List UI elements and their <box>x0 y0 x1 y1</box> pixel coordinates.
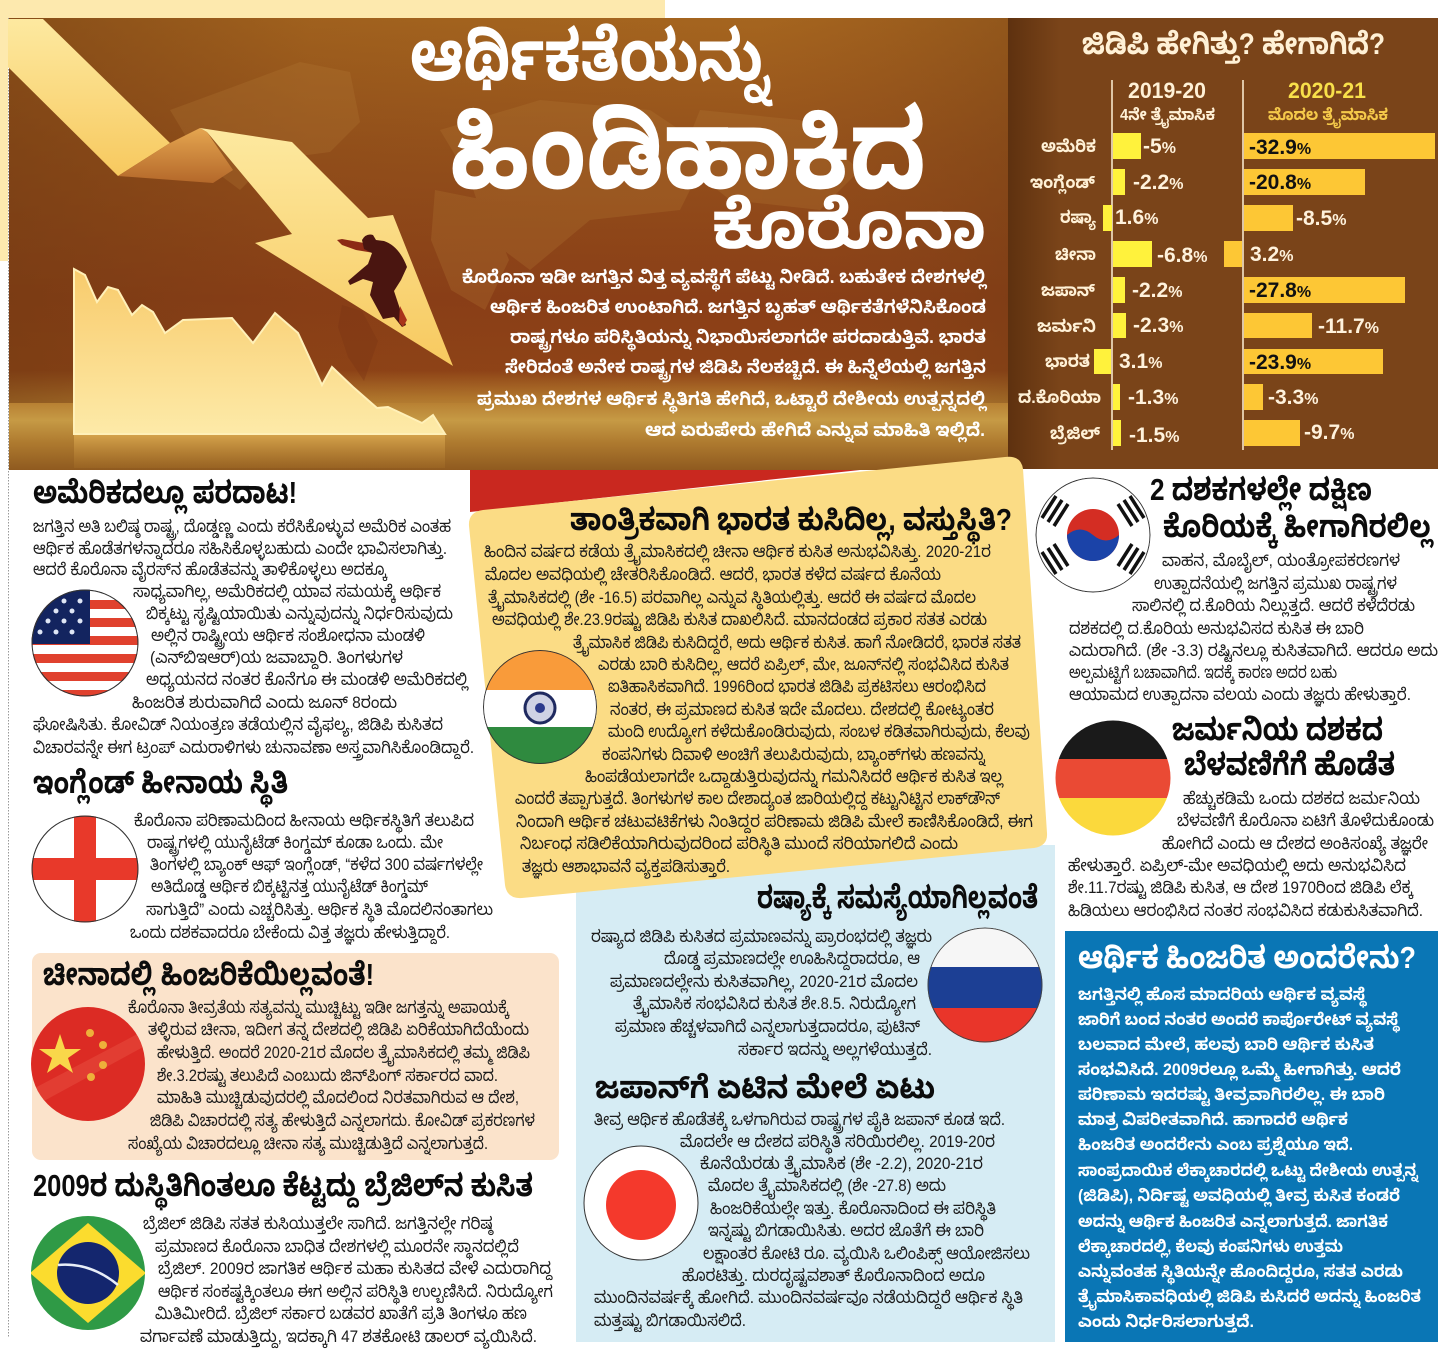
country labels: ದ.ಕೊರಿಯಾ <box>1018 388 1101 407</box>
text block: America: ಘೋಷಿಸಿತು. ಕೋವಿಡ್ ನಿಯಂತ್ರಣ ತಡೆಯಲ್ಲಿನ ವೈಫಲ್ಯ, ಜಿಡಿಪಿ ಕುಸಿತದ <box>33 716 443 738</box>
heading: South Korea <box>1150 472 1434 549</box>
text block: Germany: ಹೆಚ್ಚುಕಡಿಮೆ ಒಂದು ದಶಕದ ಜರ್ಮನಿಯ <box>1183 790 1420 811</box>
text block: intro: ಆರ್ಥಿಕ ಹಿಂಜರಿತ ಉಂಟಾಗಿದೆ. ಜಗತ್ತಿನ ಬೃಹತ್ ಆರ್ಥಿಕತೆಗಳೆನಿಸಿಕೊಂಡ <box>490 297 986 321</box>
heading: Japan: ಜಪಾನ್‌ಗೆ ಏಟಿನ ಮೇಲೆ ಏಟು <box>595 1070 935 1105</box>
text block: England: ತಿಂಗಳಲ್ಲಿ ಬ್ಯಾಂಕ್ ಆಫ್ ಇಂಗ್ಲೆಂಡ್, “ಕಳೆದ 300 ವರ್ಷಗಳಲ್ಲೇ <box>150 856 483 877</box>
icon: USA flag <box>31 589 139 698</box>
text block: Japan: ಮತ್ತಷ್ಟು ಬಿಗಡಾಯಿಸಲಿದೆ. <box>594 1312 746 1333</box>
text block: China: ಹೇಳುತ್ತಿದೆ. ಅಂದರೆ 2020-21ರ ಮೊದಲ ತ್ರೈಮಾಸಿಕದಲ್ಲಿ ತಮ್ಮ ಜಿಡಿಪಿ <box>157 1044 530 1067</box>
text block: Brazil: ಬ್ರೆಜಿಲ್ ಜಿಡಿಪಿ ಸತತ ಕುಸಿಯುತ್ತಲೇ ಸಾಗಿದೆ. ಜಗತ್ತಿನಲ್ಲೇ ಗರಿಷ್ಠ <box>143 1215 494 1236</box>
text block: England: ಕೊರೊನಾ ಪರಿಣಾಮದಿಂದ ಹೀನಾಯ ಆರ್ಥಿಕಸ್ಥಿತಿಗೆ ತಲುಪಿದ <box>134 812 474 834</box>
icon: Germany flag <box>1055 720 1171 836</box>
icon: climbing man <box>337 235 407 327</box>
text block: America: ಬಿಕ್ಕಟ್ಟು ಸೃಷ್ಟಿಯಾಯಿತು ಎನ್ನುವುದನ್ನು ನಿರ್ಧರಿಸುವುದು <box>146 605 453 627</box>
text block: India: ತಜ್ಞರು ಆಶಾಭಾವನೆ ವ್ಯಕ್ತಪಡಿಸುತ್ತಾರೆ. <box>522 858 730 879</box>
text block: South Korea: ಉತ್ಪಾದನೆಯಲ್ಲಿ ಜಗತ್ತಿನ ಪ್ರಮುಖ ರಾಷ್ಟ್ರಗಳ <box>1154 575 1397 598</box>
text block: South Korea: ದಶಕದಲ್ಲಿ ದ.ಕೊರಿಯ ಅನುಭವಿಸದ ಕುಸಿತ ಈ ಬಾರಿ <box>1069 620 1364 640</box>
bars 2019-20 <box>1094 133 1152 446</box>
panel: light blue Russia Japan <box>576 845 1055 1342</box>
values 2020-21: -27.8% <box>1249 279 1311 302</box>
text block: India: ಹಿಂಪಡೆಯಲಾಗದೇ ಒದ್ದಾಡುತ್ತಿರುವುದನ್ನು ಗಮನಿಸಿದರೆ ಆರ್ಥಿಕ ಕುಸಿತ ಇಲ್ಲ <box>585 768 1004 789</box>
text block: America: ವಿಚಾರವನ್ನೇ ಈಗ ಟ್ರಂಪ್ ಎದುರಾಳಿಗಳು ಚುನಾವಣಾ ಅಸ್ತ್ರವಾಗಿಸಿಕೊಂಡಿದ್ದಾರೆ. <box>33 739 474 761</box>
column header 2019-20: 4ನೇ ತ್ರೈಮಾಸಿಕ <box>1120 107 1215 129</box>
section: Russia <box>591 880 1043 1062</box>
text block: Brazil: ಪ್ರಮಾಣದ ಕೊರೊನಾ ಬಾಧಿತ ದೇಶಗಳಲ್ಲಿ ಮೂರನೇ ಸ್ಥಾನದಲ್ಲಿದೆ <box>155 1238 519 1260</box>
heading: China: ಚೀನಾದಲ್ಲಿ ಹಿಂಜರಿಕೆಯಿಲ್ಲವಂತೆ! <box>43 957 374 997</box>
text block: what is recession: ಹಿಂಜರಿತ ಅಂದರೇನು ಎಂಬ ಪ್ರಶ್ನೆಯೂ ಇದೆ. <box>1078 1136 1353 1157</box>
chart heading: ಜಿಡಿಪಿ ಹೇಗಿತ್ತು? ಹೇಗಾಗಿದೆ? <box>1082 28 1385 64</box>
column header 2020-21: 2020-21 <box>1288 78 1366 103</box>
title: ಆರ್ಥಿಕತೆಯನ್ನು <box>410 17 773 107</box>
text block: India: ನಂತರ, ಈ ಪ್ರಮಾಣದ ಕುಸಿತ ಇದೇ ಮೊದಲು. ದೇಶದಲ್ಲಿ ಕೋಟ್ಯಂತರ <box>610 701 994 722</box>
text block: Japan: ಮೊದಲ ತ್ರೈಮಾಸಿಕದಲ್ಲಿ (ಶೇ -27.8) ಅದು <box>708 1177 946 1200</box>
text block: England <box>130 812 493 945</box>
text block: what is recession: ಲೆಕ್ಕಾಚಾರದಲ್ಲಿ, ಕೆಲವು ಕಂಪನಿಗಳು ಉತ್ತಮ <box>1078 1238 1343 1259</box>
title: ಹಿಂಡಿಹಾಕಿದ <box>450 89 926 212</box>
heading: Russia: ರಷ್ಯಾಕ್ಕೆ ಸಮಸ್ಯೆಯಾಗಿಲ್ಲವಂತೆ <box>757 880 1038 921</box>
country labels <box>1018 137 1101 445</box>
text block: what is recession: ಪರಿಣಾಮ ಇದರಷ್ಟು ತೀವ್ರವಾಗಿರಲಿಲ್ಲ. ಈ ಬಾರಿ <box>1078 1086 1385 1107</box>
text block: Japan: ತೀವ್ರ ಆರ್ಥಿಕ ಹೊಡೆತಕ್ಕೆ ಒಳಗಾಗಿರುವ ರಾಷ್ಟ್ರಗಳ ಪೈಕಿ ಜಪಾನ್ ಕೂಡ ಇದೆ. <box>594 1111 1005 1134</box>
heading: Germany: ಬೆಳವಣಿಗೆಗೆ ಹೊಡೆತ <box>1184 747 1395 782</box>
heading: South Korea: 2 ದಶಕಗಳಲ್ಲೇ ದಕ್ಷಿಣ <box>1150 472 1372 512</box>
text block: what is recession: (ಜಿಡಿಪಿ), ನಿರ್ದಿಷ್ಟ ಅವಧಿಯಲ್ಲಿ ತೀವ್ರ ಕುಸಿತ ಕಂಡರೆ <box>1078 1187 1400 1208</box>
heading: England: ಇಂಗ್ಲೆಂಡ್ ಹೀನಾಯ ಸ್ಥಿತಿ <box>33 765 288 808</box>
values 2020-21: -8.5% <box>1296 207 1346 230</box>
panel: hero banner <box>8 17 1009 470</box>
text block: Brazil: ಆರ್ಥಿಕ ಸಂಕಷ್ಟಕ್ಕಿಂತಲೂ ಈಗ ಅಲ್ಲಿನ ಪರಿಸ್ಥಿತಿ ಉಲ್ಬಣಿಸಿದೆ. ನಿರುದ್ಯೋಗ <box>158 1283 553 1305</box>
panel: what is recession <box>1065 931 1438 1342</box>
text block: intro: ಸೇರಿದಂತೆ ಅನೇಕ ರಾಷ್ಟ್ರಗಳ ಜಿಡಿಪಿ ನೆಲಕಚ್ಚಿದೆ. ಈ ಹಿನ್ನೆಲೆಯಲ್ಲಿ ಜಗತ್ತಿನ <box>505 357 986 383</box>
title <box>410 17 986 262</box>
column header 2020-21 <box>1268 78 1388 129</box>
text block: what is recession: ಜಗತ್ತಿನಲ್ಲಿ ಹೊಸ ಮಾದರಿಯ ಆರ್ಥಿಕ ವ್ಯವಸ್ಥೆ <box>1078 986 1368 1008</box>
text block: America: ಹಿಂಜರಿತ ಶುರುವಾಗಿದೆ ಎಂದು ಜೂನ್ 8ರಂದು <box>132 694 397 712</box>
text block: what is recession: ಎನ್ನುವಂತಹ ಸ್ಥಿತಿಯನ್ನೇ ಹೊಂದಿದ್ದರೂ, ಸತತ ಎರಡು <box>1078 1263 1403 1285</box>
values 2020-21: -9.7% <box>1304 421 1354 444</box>
chart: falling area graph <box>74 269 445 468</box>
red wedge behind centre panel <box>470 470 860 512</box>
title: ಕೊರೊನಾ <box>712 188 986 262</box>
values 2019-20: 3.1% <box>1119 350 1162 373</box>
heading: Germany: ಜರ್ಮನಿಯ ದಶಕದ <box>1172 712 1383 747</box>
text block: India: ಐತಿಹಾಸಿಕವಾಗಿದೆ. 1996ರಿಂದ ಭಾರತ ಜಿಡಿಪಿ ಪ್ರಕಟಿಸಲು ಆರಂಭಿಸಿದ <box>608 678 986 697</box>
text block: India: ಹಿಂದಿನ ವರ್ಷದ ಕಡೆಯ ತ್ರೈಮಾಸಿಕದಲ್ಲಿ ಚೀನಾ ಆರ್ಥಿಕ ಕುಸಿತ ಅನುಭವಿಸಿತ್ತು. 2020-21ರ <box>484 543 991 566</box>
text block: what is recession <box>1078 986 1421 1333</box>
text block: China <box>128 999 535 1156</box>
text block: America: ಅಧ್ಯಯನದ ನಂತರ ಕೊನೆಗೂ ಈ ಮಂಡಳಿ ಅಮೆರಿಕದಲ್ಲಿ <box>146 671 469 692</box>
left cream strip <box>0 18 8 261</box>
section: South Korea <box>1036 472 1438 707</box>
text block: America: ಅಲ್ಲಿನ ರಾಷ್ಟ್ರೀಯ ಆರ್ಥಿಕ ಸಂಶೋಧನಾ ಮಂಡಳಿ <box>151 627 425 650</box>
text block: Germany: ಹೇಳುತ್ತಾರೆ. ಏಪ್ರಿಲ್-ಮೇ ಅವಧಿಯಲ್ಲಿ ಅದು ಅನುಭವಿಸಿದ <box>1068 857 1406 877</box>
values 2019-20: -2.3% <box>1133 314 1183 337</box>
text block: Germany <box>1068 790 1434 920</box>
text block: what is recession: ಸಂಭವಿಸಿದೆ. 2009ರಲ್ಲೂ ಒಮ್ಮೆ ಹೀಗಾಗಿತ್ತು. ಆದರೆ <box>1078 1061 1401 1082</box>
icon: Japan flag <box>584 1146 698 1260</box>
text block: what is recession: ಅದನ್ನು ಆರ್ಥಿಕ ಹಿಂಜರಿತ ಎನ್ನಲಾಗುತ್ತದೆ. ಜಾಗತಿಕ <box>1078 1213 1388 1234</box>
country labels: ಅಮೆರಿಕ <box>1041 137 1096 156</box>
text block: China: ಶೇ.3.2ರಷ್ಟು ತಲುಪಿದೆ ಎಂಬುದು ಜಿನ್‌ಪಿಂಗ್ ಸರ್ಕಾರದ ವಾದ. <box>157 1067 498 1088</box>
text block: India: ಮಂದಿ ಉದ್ಯೋಗ ಕಳೆದುಕೊಂಡಿರುವುದು, ಸಂಬಳ ಕಡಿತವಾಗಿರುವುದು, ಕೆಲವು <box>608 723 1030 744</box>
values 2019-20: -1.3% <box>1128 386 1178 409</box>
text block: India: ತ್ರೈಮಾಸಿಕದಲ್ಲಿ (ಶೇ -16.5) ಪರವಾಗಿಲ್ಲ ಎನ್ನುವ ಸ್ಥಿತಿಯಲ್ಲಿತ್ತು. ಆದರೆ ಈ ವರ್ಷದ ಮೊದಲ <box>488 589 976 612</box>
text block: America: ಆರ್ಥಿಕ ಹೊಡೆತಗಳನ್ನಾದರೂ ಸಹಿಸಿಕೊಳ್ಳಬಹುದು ಎಂದೇ ಭಾವಿಸಲಾಗಿತ್ತು. <box>33 540 447 561</box>
text block: England: ಅತಿದೊಡ್ಡ ಆರ್ಥಿಕ ಬಿಕ್ಕಟ್ಟಿನತ್ತ ಯುನೈಟೆಡ್ ಕಿಂಗ್ಡಮ್ <box>151 878 429 900</box>
icon: Russia flag <box>927 927 1043 1044</box>
text block: Brazil: ಮಿತಿಮೀರಿದೆ. ಬ್ರೆಜಿಲ್ ಸರ್ಕಾರ ಬಡವರ ಖಾತೆಗೆ ಪ್ರತಿ ತಿಂಗಳೂ ಹಣ <box>155 1305 527 1324</box>
values 2019-20 <box>1115 135 1207 447</box>
icon: China flag <box>31 1007 145 1121</box>
text block: intro: ಕೊರೊನಾ ಇಡೀ ಜಗತ್ತಿನ ವಿತ್ತ ವ್ಯವಸ್ಥೆಗೆ ಪೆಟ್ಟು ನೀಡಿದೆ. ಬಹುತೇಕ ದೇಶಗಳಲ್ಲಿ <box>462 267 988 292</box>
text block: Russia: ರಷ್ಯಾದ ಜಿಡಿಪಿ ಕುಸಿತದ ಪ್ರಮಾಣವನ್ನು ಪ್ರಾರಂಭದಲ್ಲಿ ತಜ್ಞರು <box>591 928 932 949</box>
icon: England flag <box>31 815 139 923</box>
text block: America: ಆದರೆ ಕೊರೊನಾ ವೈರಸ್‌ನ ಹೊಡೆತವನ್ನು ತಾಳಿಕೊಳ್ಳಲು ಅದಕ್ಕೂ <box>33 561 388 583</box>
country labels: ಇಂಗ್ಲೆಂಡ್ <box>1030 173 1096 195</box>
values 2020-21: -23.9% <box>1249 351 1311 374</box>
heading: America: ಅಮೆರಿಕದಲ್ಲೂ ಪರದಾಟ! <box>33 475 297 515</box>
text block: intro: ರಾಷ್ಟ್ರಗಳೂ ಪರಿಸ್ಥಿತಿಯನ್ನು ನಿಭಾಯಿಸಲಾಗದೇ ಪರದಾಡುತ್ತಿವೆ. ಭಾರತ <box>510 327 986 353</box>
section: America <box>31 475 474 761</box>
text block: Japan: ಮೊದಲೇ ಆ ದೇಶದ ಪರಿಸ್ಥಿತಿ ಸರಿಯಿರಲಿಲ್ಲ. 2019-20ರ <box>680 1133 995 1155</box>
text block: India: ಮೊದಲ ಅವಧಿಯಲ್ಲಿ ಚೇತರಿಸಿಕೊಂಡಿದೆ. ಆದರೆ, ಭಾರತ ಕಳೆದ ವರ್ಷದ ಕೊನೆಯ <box>485 566 941 586</box>
heading: Germany <box>1172 712 1395 782</box>
panel: China <box>31 953 559 1160</box>
values 2019-20: -1.5% <box>1129 424 1179 447</box>
values 2020-21: -20.8% <box>1249 171 1311 194</box>
icon: Brazil flag <box>30 1216 146 1330</box>
text block: India: ತ್ರೈಮಾಸಿಕ ಜಿಡಿಪಿ ಕುಸಿದಿದ್ದರೆ, ಅದು ಆರ್ಥಿಕ ಕುಸಿತ. ಹಾಗೆ ನೋಡಿದರೆ, ಭಾರತ ಸತತ <box>573 634 1021 657</box>
text block: America <box>33 518 474 761</box>
icon: falling arrow <box>8 19 453 366</box>
column header 2019-20 <box>1120 78 1215 129</box>
values 2020-21 <box>1249 136 1379 444</box>
illustration: world map shadow <box>170 62 860 310</box>
text block: India: ನಿಂದಾಗಿ ಆರ್ಥಿಕ ಚಟುವಟಿಕೆಗಳು ನಿಂತಿದ್ದರ ಪರಿಣಾಮ ಜಿಡಿಪಿ ಮೇಲೆ ಕಾಣಿಸಿಕೊಂಡಿದೆ, ಈಗ <box>516 813 1033 834</box>
section: Germany <box>1055 712 1434 920</box>
text block: Germany: ಹಿಡಿಯಲು ಆರಂಭಿಸಿದ ನಂತರ ಸಂಭವಿಸಿದ ಕಡುಕುಸಿತವಾಗಿದೆ. <box>1068 902 1423 920</box>
country labels: ಬ್ರೆಜಿಲ್ <box>1050 424 1100 445</box>
text block: India: ನಿರ್ಬಂಧ ಸಡಿಲಿಕೆಯಾಗಿರುವುದರಿಂದ ಪರಿಸ್ಥಿತಿ ಮುಂದೆ ಸರಿಯಾಗಲಿದೆ ಎಂದು <box>520 835 958 857</box>
heading: India: ತಾಂತ್ರಿಕವಾಗಿ ಭಾರತ ಕುಸಿದಿಲ್ಲ, ವಸ್ತುಸ್ಥಿತಿ? <box>570 502 1012 545</box>
text block: intro <box>462 267 988 443</box>
text block: South Korea: ವಾಹನ, ಮೊಬೈಲ್, ಯಂತ್ರೋಪಕರಣಗಳ <box>1162 552 1400 574</box>
text block: what is recession: ಎಂದು ನಿರ್ಧರಿಸಲಾಗುತ್ತದೆ. <box>1078 1313 1254 1333</box>
text block: what is recession: ತ್ರೈಮಾಸಿಕಾವಧಿಯಲ್ಲಿ ಜಿಡಿಪಿ ಕುಸಿದರೆ ಅದನ್ನು ಹಿಂಜರಿತ <box>1078 1288 1421 1311</box>
text block: intro: ಪ್ರಮುಖ ದೇಶಗಳ ಆರ್ಥಿಕ ಸ್ಥಿತಿಗತಿ ಹೇಗಿದೆ, ಒಟ್ಟಾರೆ ದೇಶೀಯ ಉತ್ಪನ್ನದಲ್ಲಿ <box>477 389 988 414</box>
text block: Japan: ಹೊರಟಿತ್ತು. ದುರದೃಷ್ಟವಶಾತ್ ಕೊರೊನಾದಿಂದ ಅದೂ <box>682 1267 985 1289</box>
text block: Brazil: ಬ್ರೆಜಿಲ್. 2009ರ ಜಾಗತಿಕ ಆರ್ಥಿಕ ಮಹಾ ಕುಸಿತದ ವೇಳೆ ಎದುರಾಗಿದ್ದ <box>158 1260 553 1281</box>
text block: Japan: ಮುಂದಿನವರ್ಷಕ್ಕೆ ಹೋಗಿದೆ. ಮುಂದಿನವರ್ಷವೂ ನಡೆಯದಿದ್ದರೆ ಆರ್ಥಿಕ ಸ್ಥಿತಿ <box>594 1289 1023 1311</box>
text block: Russia: ಸರ್ಕಾರ ಇದನ್ನು ಅಲ್ಲಗಳೆಯುತ್ತದೆ. <box>738 1041 932 1062</box>
section: Japan <box>584 1070 1030 1333</box>
values 2019-20: -5% <box>1143 135 1176 158</box>
text block: Russia: ದೊಡ್ಡ ಪ್ರಮಾಣದಲ್ಲೇ ಊಹಿಸಿದ್ದರಾದರೂ, ಆ <box>664 950 920 971</box>
text block: Russia: ತ್ರೈಮಾಸಿಕ ಸಂಭವಿಸಿದ ಕುಸಿತ ಶೇ.8.5. ನಿರುದ್ಯೋಗ <box>633 995 916 1018</box>
heading: Brazil: 2009ರ ದುಸ್ಥಿತಿಗಿಂತಲೂ ಕೆಟ್ಟದ್ದು ಬ್ರೆಜಿಲ್‌ನ ಕುಸಿತ <box>33 1168 533 1211</box>
section: England <box>31 765 493 945</box>
text block: South Korea <box>1069 552 1438 707</box>
text block: China: ಮಾಹಿತಿ ಮುಚ್ಚಿಡುವುದರಲ್ಲಿ ಮೊದಲಿಂದ ನಿರತವಾಗಿರುವ ಆ ದೇಶ, <box>157 1089 519 1110</box>
section: Brazil <box>30 1168 553 1349</box>
text block: China: ತಳ್ಳಿರುವ ಚೀನಾ, ಇದೀಗ ತನ್ನ ದೇಶದಲ್ಲಿ ಜಿಡಿಪಿ ಏರಿಕೆಯಾಗಿದೆಯೆಂದು <box>148 1021 529 1042</box>
column header 2020-21: ಮೊದಲ ತ್ರೈಮಾಸಿಕ <box>1268 107 1388 129</box>
column header 2019-20: 2019-20 <box>1128 78 1206 103</box>
text block: Brazil: ವರ್ಗಾವಣೆ ಮಾಡುತ್ತಿದ್ದು, ಇದಕ್ಕಾಗಿ 47 ಶತಕೋಟಿ ಡಾಲರ್ ವ್ಯಯಿಸಿದೆ. <box>140 1328 537 1349</box>
text block: what is recession: ಮಾತ್ರ ವಿಪರೀತವಾಗಿದೆ. ಹಾಗಾದರೆ ಆರ್ಥಿಕ <box>1078 1111 1348 1131</box>
text block: Germany: ಹೋಗಿದೆ ಎಂದು ಆ ದೇಶದ ಅಂಕಿಸಂಖ್ಯೆ ತಜ್ಞರೇ <box>1162 835 1428 856</box>
text block: Russia <box>591 928 932 1062</box>
country labels: ಭಾರತ <box>1045 352 1090 371</box>
text block: America: ಸಾಧ್ಯವಾಗಿಲ್ಲ, ಅಮೆರಿಕದಲ್ಲಿ ಯಾವ ಸಮಯಕ್ಕೆ ಆರ್ಥಿಕ <box>133 583 441 604</box>
text block: what is recession: ಜಾರಿಗೆ ಬಂದ ನಂತರ ಅಂದರೆ ಕಾರ್ಪೊರೇಟ್ ವ್ಯವಸ್ಥೆ <box>1078 1011 1401 1033</box>
country labels: ಚೀನಾ <box>1055 245 1096 264</box>
values 2019-20: 1.6% <box>1115 206 1158 229</box>
section: India text <box>483 502 1033 879</box>
text block: America: (ಎನ್‌ಬಿಇಆರ್)ಯ ಜವಾಬ್ದಾರಿ. ತಿಂಗಳುಗಳ <box>150 649 403 670</box>
country labels: ಜಪಾನ್ <box>1041 281 1096 300</box>
panel: yellow India <box>469 457 1047 898</box>
text block: India: ಕಂಪನಿಗಳು ದಿವಾಳಿ ಅಂಚಿಗೆ ತಲುಪಿರುವುದು, ಬ್ಯಾಂಕ್‌ಗಳು ಹಣವನ್ನು <box>602 746 986 767</box>
text block: China: ಕೊರೊನಾ ತೀವ್ರತೆಯ ಸತ್ಯವನ್ನು ಮುಚ್ಚಿಟ್ಟು ಇಡೀ ಜಗತ್ತನ್ನು ಅಪಾಯಕ್ಕೆ <box>128 999 510 1020</box>
text block: South Korea: ಸಾಲಿನಲ್ಲಿ ದ.ಕೊರಿಯ ನಿಲ್ಲುತ್ತದೆ. ಆದರೆ ಕಳೆದೆರಡು <box>1132 597 1415 617</box>
text block: South Korea: ಅಲ್ಪಮಟ್ಟಿಗೆ ಬಚಾವಾಗಿದೆ. ಇದಕ್ಕೆ ಕಾರಣ ಅದರ ಬಹು <box>1069 664 1337 685</box>
bars 2020-21 <box>1224 133 1435 446</box>
text block: Japan: ಹಿಂಜರಿಕೆಯಲ್ಲೇ ಇತ್ತು. ಕೊರೊನಾದಿಂದ ಈ ಪರಿಸ್ಥಿತಿ <box>710 1200 996 1222</box>
text block: America: ಜಗತ್ತಿನ ಅತಿ ಬಲಿಷ್ಠ ರಾಷ್ಟ್ರ, ದೊಡ್ಡಣ್ಣ ಎಂದು ಕರೆಸಿಕೊಳ್ಳುವ ಅಮೆರಿಕ ಎಂತಹ <box>33 518 451 541</box>
text block: India: ಅವಧಿಯಲ್ಲಿ ಶೇ.23.9ರಷ್ಟು ಜಿಡಿಪಿ ಕುಸಿತ ದಾಖಲಿಸಿದೆ. ಮಾನದಂಡದ ಪ್ರಕಾರ ಸತತ ಎರಡು <box>492 611 987 632</box>
text block: England: ರಾಷ್ಟ್ರಗಳಲ್ಲಿ ಯುನೈಟೆಡ್ ಕಿಂಗ್ಡಮ್ ಕೂಡಾ ಒಂದು. ಮೇ <box>147 834 443 857</box>
top cream strip <box>0 0 665 18</box>
text block: Germany: ಶೇ.11.7ರಷ್ಟು ಜಿಡಿಪಿ ಕುಸಿತ, ಆ ದೇಶ 1970ರಿಂದ ಜಿಡಿಪಿ ಲೆಕ್ಕ <box>1068 879 1414 900</box>
icon: South Korea flag <box>1036 478 1150 592</box>
values 2020-21: -11.7% <box>1318 315 1379 338</box>
text block: what is recession: ಬಲವಾದ ಮೇಲೆ, ಹಲವು ಬಾರಿ ಆರ್ಥಿಕ ಕುಸಿತ <box>1078 1036 1374 1054</box>
values 2020-21: 3.2% <box>1250 243 1293 266</box>
panel: GDP chart <box>1008 18 1438 469</box>
values 2019-20: -2.2% <box>1133 171 1183 194</box>
text block: England: ಒಂದು ದಶಕವಾದರೂ ಬೇಕೆಂದು ವಿತ್ತ ತಜ್ಞರು ಹೇಳುತ್ತಿದ್ದಾರೆ. <box>130 924 450 945</box>
text block: Japan: ಇನ್ನಷ್ಟು ಬಿಗಡಾಯಿಸಿತು. ಅದರ ಜೊತೆಗೆ ಈ ಬಾರಿ <box>708 1222 984 1243</box>
text block: South Korea: ಆಯಾಮದ ಉತ್ಪಾದನಾ ವಲಯ ಎಂದು ತಜ್ಞರು ಹೇಳುತ್ತಾರೆ. <box>1069 686 1411 707</box>
icon: India flag <box>483 650 597 765</box>
country labels: ರಷ್ಯಾ <box>1060 208 1096 231</box>
text block: India: ಎಂದರೆ ತಪ್ಪಾಗುತ್ತದೆ. ತಿಂಗಳುಗಳ ಕಾಲ ದೇಶಾದ್ಯಂತ ಜಾರಿಯಲ್ಲಿದ್ದ ಕಟ್ಟುನಿಟ್ಟಿನ ಲಾಕ್‌ಡೌನ್ <box>515 790 1001 811</box>
values 2019-20: -6.8% <box>1157 244 1207 267</box>
text block: Japan: ಕೊನೆಯೆರಡು ತ್ರೈಮಾಸಿಕ (ಶೇ -2.2), 2020-21ರ <box>700 1155 983 1178</box>
values 2020-21: -3.3% <box>1268 386 1318 409</box>
text block: India: ಎರಡು ಬಾರಿ ಕುಸಿದಿಲ್ಲ, ಆದರೆ ಏಪ್ರಿಲ್, ಮೇ, ಜೂನ್‌ನಲ್ಲಿ ಸಂಭವಿಸಿದ ಕುಸಿತ <box>598 656 1009 676</box>
text block: China: ಜಿಡಿಪಿ ವಿಚಾರದಲ್ಲಿ ಸತ್ಯ ಹೇಳುತ್ತಿದೆ ಎನ್ನಲಾಗದು. ಕೋವಿಡ್ ಪ್ರಕರಣಗಳ <box>150 1112 535 1133</box>
text block: India <box>484 543 1033 879</box>
text block: Japan: ಲಕ್ಷಾಂತರ ಕೋಟಿ ರೂ. ವ್ಯಯಿಸಿ ಒಲಿಂಪಿಕ್ಸ್ ಆಯೋಜಿಸಲು <box>703 1245 1030 1266</box>
text block: intro: ಆದ ಏರುಪೇರು ಹೇಗಿದೆ ಎನ್ನುವ ಮಾಹಿತಿ ಇಲ್ಲಿದೆ. <box>645 420 985 443</box>
text block: Russia: ಪ್ರಮಾಣ ಹೆಚ್ಚಳವಾಗಿದೆ ಎನ್ನಲಾಗುತ್ತದಾದರೂ, ಪುಟಿನ್ <box>615 1018 921 1039</box>
text block: Japan <box>594 1111 1030 1333</box>
text block: Brazil <box>140 1215 553 1349</box>
country labels: ಜರ್ಮನಿ <box>1037 317 1096 336</box>
values 2019-20: -2.2% <box>1132 279 1182 302</box>
illustration: south america shadow <box>338 305 378 381</box>
text block: England: ಸಾಗುತ್ತಿದೆ” ಎಂದು ಎಚ್ಚರಿಸಿತ್ತು. ಆರ್ಥಿಕ ಸ್ಥಿತಿ ಮೊದಲಿನಂತಾಗಲು <box>146 901 493 923</box>
text block: China: ಸಂಖ್ಯೆಯ ವಿಚಾರದಲ್ಲೂ ಚೀನಾ ಸತ್ಯ ಮುಚ್ಚಿಡುತ್ತಿದೆ ಎನ್ನಲಾಗುತ್ತದೆ. <box>128 1135 488 1156</box>
text block: what is recession: ಸಾಂಪ್ರದಾಯಿಕ ಲೆಕ್ಕಾಚಾರದಲ್ಲಿ ಒಟ್ಟು ದೇಶೀಯ ಉತ್ಪನ್ನ <box>1078 1162 1419 1183</box>
text block: Russia: ಪ್ರಮಾಣದಲ್ಲೇನು ಕುಸಿತವಾಗಿಲ್ಲ, 2020-21ರ ಮೊದಲ <box>610 973 918 993</box>
values 2020-21: -32.9% <box>1249 136 1311 159</box>
